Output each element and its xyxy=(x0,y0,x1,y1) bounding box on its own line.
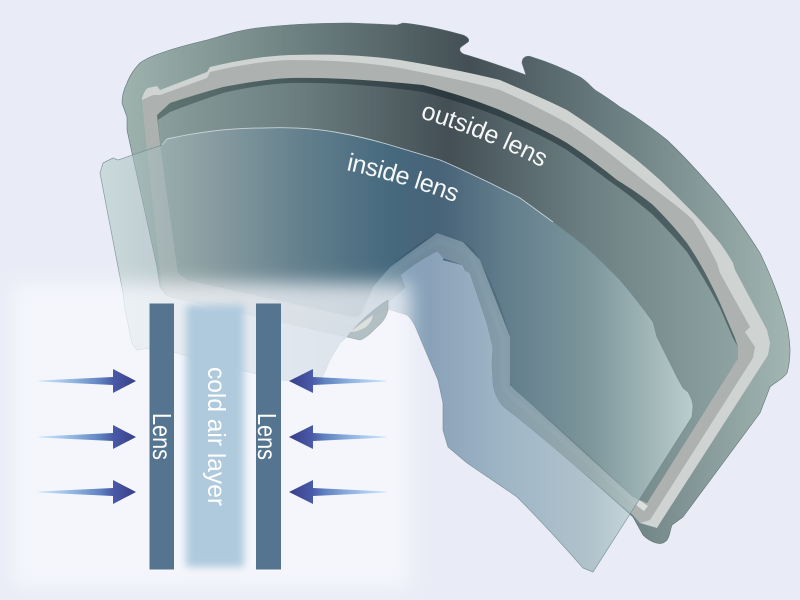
inside lens xyxy=(100,128,693,572)
dark inner lens edge xyxy=(157,78,738,503)
arrow left 3 xyxy=(39,480,136,504)
inside lens top edge highlight xyxy=(162,128,553,222)
arrows from right xyxy=(289,369,386,504)
outside lens label: outside lens xyxy=(422,106,546,166)
nose bridge ring xyxy=(190,241,636,503)
arrow right 1 xyxy=(289,369,386,393)
inside lens label: inside lens xyxy=(348,152,458,201)
right lens label: Lens xyxy=(252,413,282,460)
frame highlight band xyxy=(142,55,770,528)
arrow left 1 xyxy=(39,369,136,393)
nose bulge over panel xyxy=(347,300,388,340)
arrow right 2 xyxy=(289,425,386,449)
pale cross-section panel xyxy=(12,283,410,588)
left lens bar xyxy=(150,304,174,570)
arrow right 3 xyxy=(289,480,386,504)
outside lens goggle frame xyxy=(122,23,790,544)
frame grey band xyxy=(142,60,755,523)
left lens label: Lens xyxy=(147,413,177,460)
cold air layer band xyxy=(186,305,244,567)
outer lens surface xyxy=(158,83,738,503)
arrow left 2 xyxy=(39,425,136,449)
lens corner highlight xyxy=(636,500,648,511)
right lens bar xyxy=(256,304,281,570)
arrows from left xyxy=(39,369,136,504)
cold air layer label: cold air layer xyxy=(202,367,230,506)
frame silhouette xyxy=(122,23,790,544)
nose highlight spot xyxy=(350,315,373,332)
inside lens shape xyxy=(100,128,693,572)
